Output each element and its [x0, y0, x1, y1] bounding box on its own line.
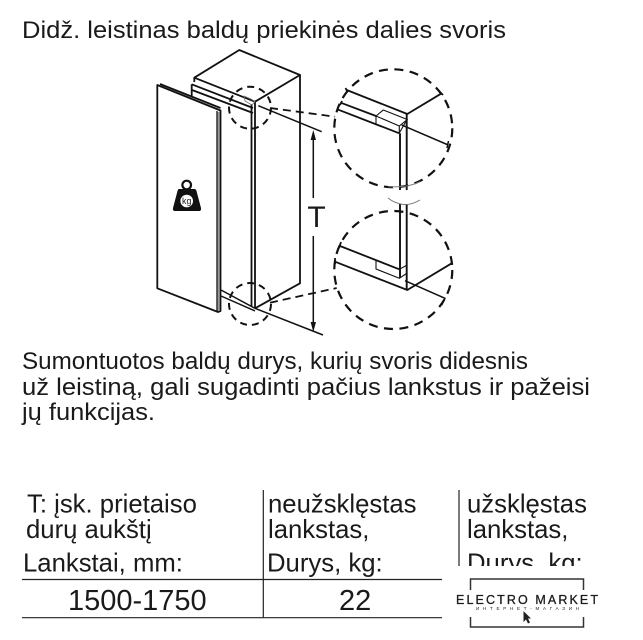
column 3 header — [467, 490, 587, 578]
column 2 header: lankstas, — [268, 516, 369, 544]
small dashed circle: top hinge — [229, 87, 271, 129]
dimension arrow T — [307, 130, 326, 332]
warning paragraph: jų funkcijas. — [21, 399, 155, 426]
icon: weight kg: kg — [182, 196, 191, 206]
cabinet body — [192, 50, 300, 311]
break marks — [388, 182, 420, 205]
table — [22, 490, 643, 640]
dashed connectors — [270, 108, 337, 303]
column 1 header — [23, 490, 197, 578]
warning paragraph: Sumontuotos baldų durys, kurių svoris didesnis — [22, 348, 528, 375]
logo: Electro Market: ELECTRO MARKET — [456, 593, 598, 607]
column 3 header: lankstas, — [467, 516, 568, 544]
value: weight: 22 — [339, 585, 371, 617]
title: Didž. leistinas baldų priekinės dalies svoris — [22, 17, 506, 44]
column 1 header: T: įsk. prietaiso — [27, 490, 197, 518]
small dashed circle: bottom hinge — [229, 283, 271, 325]
column 2 header: neužsklęstas — [268, 490, 416, 518]
column 2 header: Durys, kg: — [267, 550, 383, 578]
column 2 header — [267, 490, 416, 578]
door panel with kg weight — [157, 84, 220, 312]
logo: Electro Market: ИНТЕРНЕТ-МАГАЗИН — [476, 606, 579, 611]
icon: weight kg — [173, 181, 201, 211]
warning paragraph: už leistiną, gali sugadinti pačius lankstus ir pažeisi — [22, 374, 590, 401]
column 3 header: Durys, kg: — [467, 550, 583, 578]
column 3 header: užsklęstas — [467, 490, 587, 518]
logo: Electro Market — [456, 579, 598, 627]
icon: cursor — [524, 611, 531, 624]
warning paragraph — [21, 348, 590, 426]
height dimension lines — [255, 106, 323, 335]
table grid lines — [22, 580, 442, 618]
column 1 header: Lankstai, mm: — [23, 550, 183, 578]
column 1 header: durų aukštį — [26, 516, 152, 544]
value: height range: 1500-1750 — [68, 585, 207, 617]
dimension arrow T: T — [307, 201, 326, 234]
large detail circle: bottom hinge — [334, 204, 452, 329]
large detail circle: top hinge — [334, 69, 452, 190]
diagram: cabinet with door and hinge details — [157, 50, 452, 335]
